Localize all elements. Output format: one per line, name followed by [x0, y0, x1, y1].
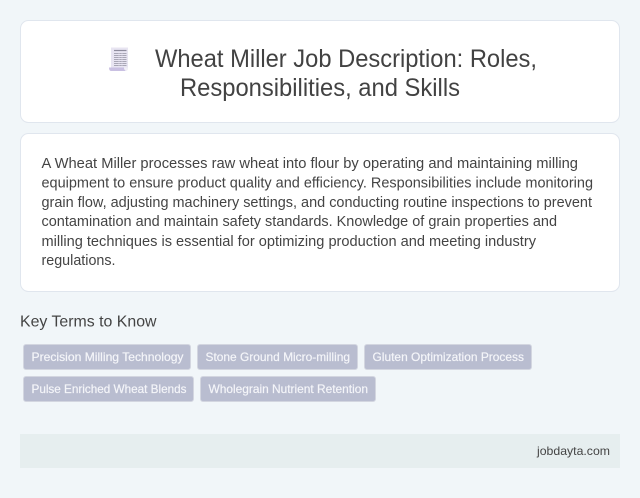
- panel: description card: [20, 134, 620, 292]
- title: Wheat Miller Job Description: Roles,: [155, 45, 537, 73]
- tag: Pulse Enriched Wheat Blends: Pulse Enriched Wheat Blends: [32, 382, 186, 396]
- icon: document scroll: [109, 48, 128, 71]
- description text: A Wheat Miller processes raw wheat into flour by operating and maintaining milling: [42, 156, 578, 172]
- description text: grain flow, adjusting machinery settings, and conducting routine inspections to prevent: [42, 195, 592, 211]
- tag: Stone Ground Micro-milling: [198, 344, 358, 370]
- tag: Pulse Enriched Wheat Blends: [24, 376, 194, 402]
- title: Responsibilities, and Skills: [180, 74, 460, 102]
- description text: equipment to ensure product quality and efficiency. Responsibilities include monitoring: [42, 176, 593, 192]
- tag: Wholegrain Nutrient Retention: [200, 376, 376, 402]
- tag: Precision Milling Technology: [24, 344, 190, 370]
- description text: regulations.: [42, 253, 116, 269]
- tag: Precision Milling Technology: Precision Milling Technology: [32, 350, 184, 364]
- tag: Stone Ground Micro-milling: Stone Ground Micro-milling: [206, 350, 350, 364]
- tag: Gluten Optimization Process: Gluten Optimization Process: [372, 350, 524, 364]
- heading: key terms: Key Terms to Know: [20, 314, 157, 330]
- panel: title card: [20, 20, 620, 122]
- title: [155, 45, 537, 102]
- tag: Wholegrain Nutrient Retention: Wholegrain Nutrient Retention: [208, 382, 368, 396]
- description text: [42, 156, 593, 269]
- description text: milling techniques is essential for optimizing production and meeting industry: [42, 234, 537, 250]
- footer bar: [20, 434, 620, 468]
- description text: contamination and maintain safety standards. Knowledge of grain properties and: [42, 214, 557, 230]
- tag: Gluten Optimization Process: [364, 344, 532, 370]
- footer source text: jobdayta.com: [536, 444, 610, 458]
